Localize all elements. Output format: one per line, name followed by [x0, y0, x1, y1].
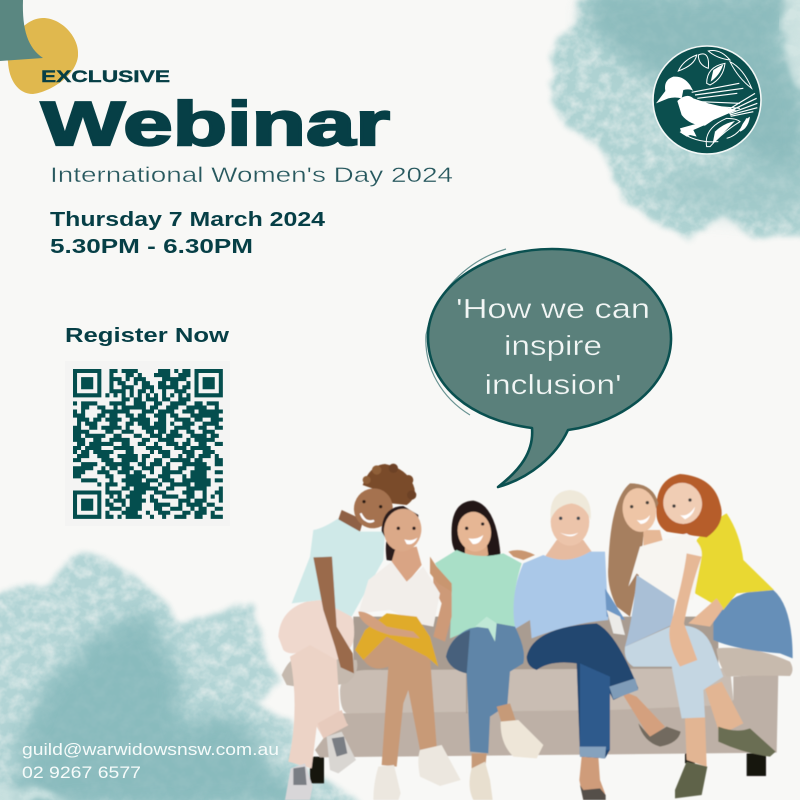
event time: 5.30PM - 6.30PM: [50, 236, 253, 258]
sofa: [282, 617, 792, 783]
teal corner shape: [0, 0, 43, 61]
heading: exclusive: EXCLUSIVE: [41, 67, 170, 86]
icon: wing and tail feathers: [692, 83, 757, 116]
icon: bird body: [677, 96, 737, 126]
logo: kookaburra badge: [653, 46, 761, 154]
bubble text: [456, 293, 650, 400]
contact email: guild@warwidowsnsw.com.au: [22, 740, 279, 759]
register heading: Register Now: [65, 325, 230, 347]
speech bubble: [426, 249, 671, 487]
bubble shape: [428, 249, 671, 487]
woman in mint tee with curly hair: [278, 464, 416, 800]
contact phone: 02 9267 6577: [22, 763, 141, 782]
watercolour wash: bottom left: [0, 552, 372, 800]
QR code: [65, 361, 230, 526]
decorative gold blob: [8, 18, 78, 94]
icon: leaves: [678, 51, 752, 147]
woman in yellow sweater: [656, 474, 793, 658]
icon: feet: [680, 122, 703, 137]
woman in overalls: [608, 483, 776, 798]
woman in mint blouse: [433, 501, 543, 800]
bubble text: inspire: [504, 330, 602, 361]
photo: six women on a sofa: [278, 464, 793, 800]
bubble text: inclusion': [484, 369, 622, 400]
bubble text: 'How we can: [456, 293, 650, 324]
icon: bird head and beak: [656, 77, 693, 103]
woman in light blue top: [513, 490, 681, 800]
subheading: International Women's Day 2024: [50, 164, 453, 187]
heading: webinar: Webinar: [41, 90, 390, 159]
event date: Thursday 7 March 2024: [50, 209, 326, 231]
watercolour wash: top right: [550, 0, 800, 240]
woman in white blouse: [355, 506, 461, 800]
